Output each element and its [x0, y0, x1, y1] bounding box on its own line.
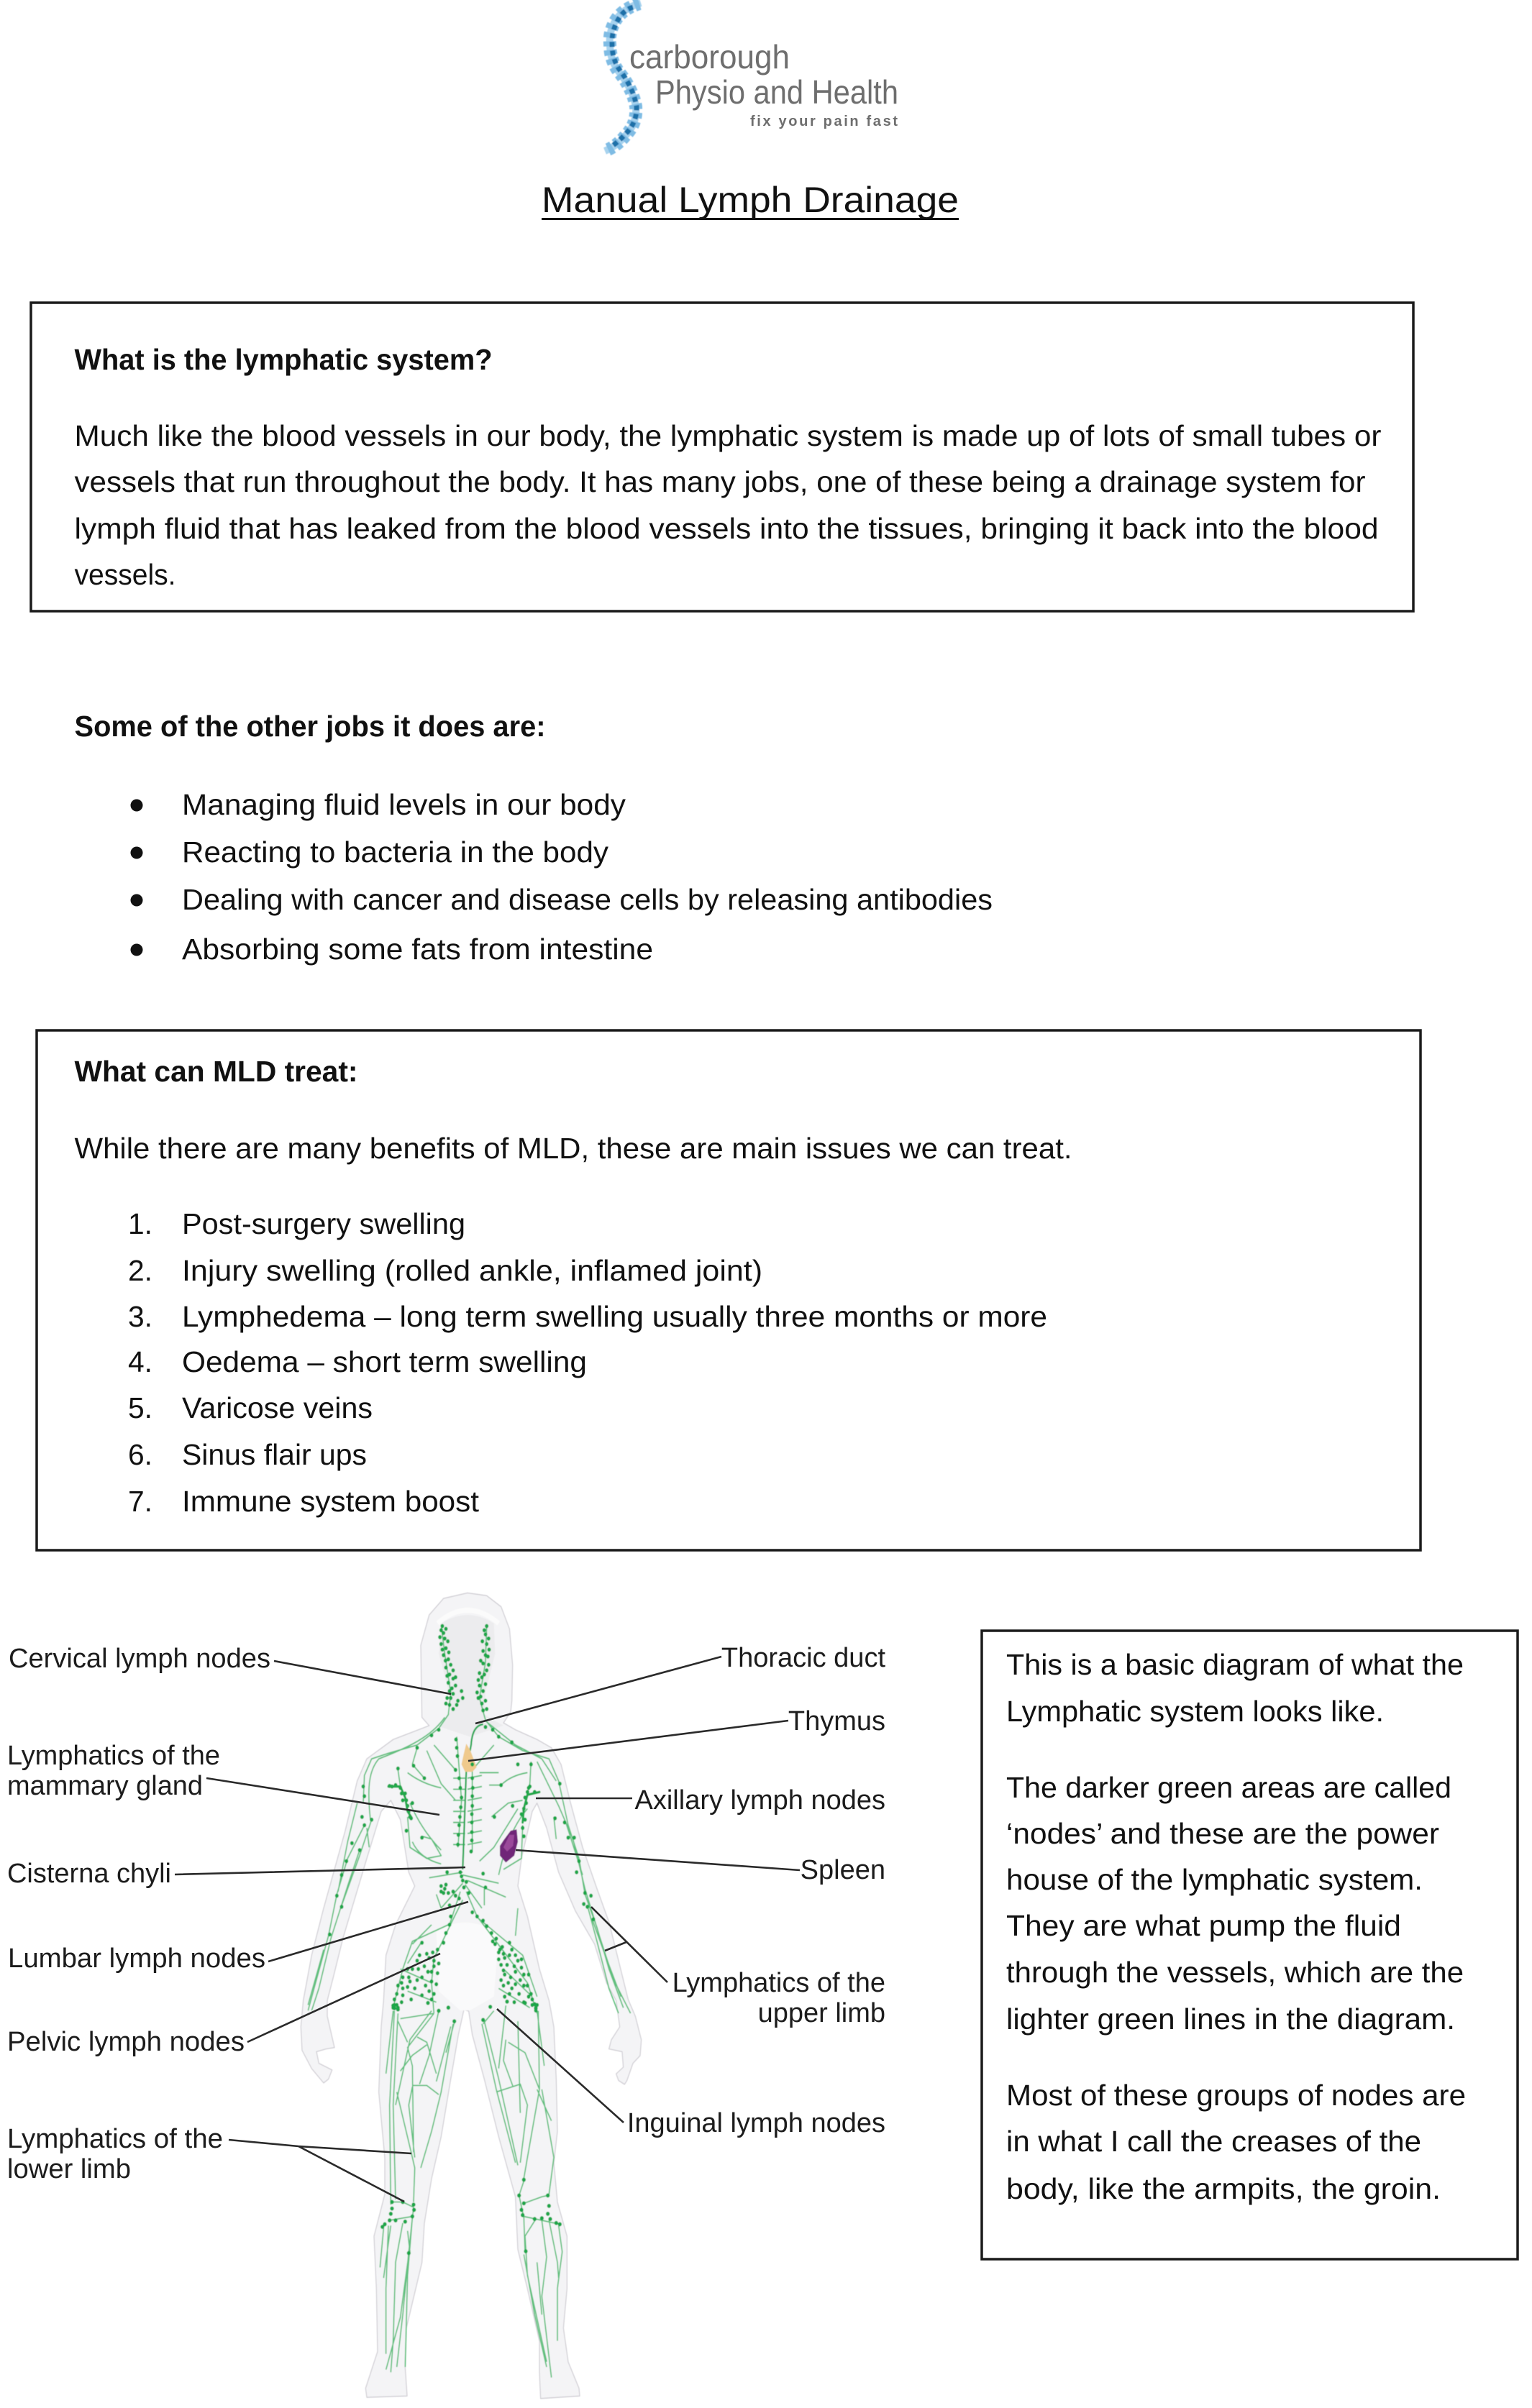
lymph nodes: upper body [329, 1626, 593, 2010]
label: lymphatics of the upper limb [672, 1968, 885, 2028]
bullet list: other jobs: Absorbing some fats from intestine [182, 933, 653, 966]
logo: Scarborough Physio and Health: Physio and Health [655, 73, 898, 111]
body outline [301, 1593, 642, 2399]
label: lymphatics of the mammary gland: mammary gland [7, 1771, 203, 1801]
label: lymphatics of the upper limb: Lymphatics of the [672, 1968, 885, 1998]
heading: what can MLD treat: What can MLD treat: [75, 1055, 358, 1088]
icon: spine forming letter S [605, 3, 641, 151]
text block: nodes explanation: ‘nodes’ and these are the power [1006, 1817, 1439, 1850]
numbered list: treatable issues: Lymphedema – long term swelling usually three months or more [182, 1300, 1047, 1333]
numbered list: treatable issues: 3. [128, 1300, 152, 1333]
numbered list: treatable issues: 7. [128, 1485, 152, 1518]
label: lymphatics of the lower limb [7, 2124, 223, 2184]
numbered list: treatable issues: Immune system boost [182, 1485, 480, 1518]
label: lymphatics of the mammary gland [7, 1741, 220, 1801]
bullet list: other jobs [131, 788, 993, 966]
title: Manual Lymph Drainage [542, 180, 959, 220]
text block: nodes explanation: through the vessels, which are the [1006, 1956, 1464, 1989]
numbered list: treatable issues: Oedema – short term swelling [182, 1345, 587, 1378]
text block: intro: This is a basic diagram of what the [1006, 1648, 1464, 1681]
label: lymphatics of the lower limb: Lymphatics of the [7, 2124, 223, 2154]
text block: lymphatic system description: vessels that run throughout the body. It has many jobs, one of these being a drainage system for [75, 465, 1365, 498]
text block: nodes explanation: The darker green areas are called [1006, 1771, 1451, 1804]
label: cervical lymph nodes: Cervical lymph nodes [9, 1644, 270, 1674]
text block: nodes explanation [1006, 1771, 1464, 2036]
thymus [462, 1744, 477, 1772]
label: lymphatics of the upper limb: upper limb [758, 1998, 885, 2028]
label: inguinal lymph nodes: Inguinal lymph nodes [627, 2108, 885, 2138]
panel: diagram explanation [982, 1631, 1518, 2259]
numbered list: treatable issues: Varicose veins [182, 1391, 373, 1424]
text block: lymphatic system description: Much like the blood vessels in our body, the lymphatic system is made up of lots of small tubes or [75, 419, 1381, 452]
label: lumbar lymph nodes: Lumbar lymph nodes [8, 1944, 265, 1974]
heading: other jobs: Some of the other jobs it does are: [75, 710, 545, 743]
label: thoracic duct: Thoracic duct [721, 1643, 885, 1673]
leader lines [175, 1657, 800, 2202]
label: lymphatics of the lower limb: lower limb [7, 2154, 131, 2184]
text block: lymphatic system description: vessels. [75, 558, 175, 591]
lymph vessels: legs [380, 2005, 562, 2378]
text block: intro: While there are many benefits of MLD, these are main issues we can treat. [75, 1132, 1072, 1165]
numbered list: treatable issues: Post-surgery swelling [182, 1207, 465, 1240]
lymph nodes: axilla clusters [388, 1787, 539, 1823]
text block: creases of the body [1006, 2079, 1466, 2205]
logo: Scarborough Physio and Health: fix your pain fast [750, 114, 898, 129]
bullet list: other jobs: Dealing with cancer and disease cells by releasing antibodies [182, 883, 993, 916]
numbered list: treatable issues: Sinus flair ups [182, 1438, 367, 1471]
label: thymus: Thymus [788, 1706, 885, 1736]
heading: what is the lymphatic system: What is the lymphatic system? [75, 343, 492, 376]
text block: intro: Lymphatic system looks like. [1006, 1695, 1384, 1728]
panel: what is the lymphatic system [31, 303, 1413, 611]
text block: nodes explanation: They are what pump the fluid [1006, 1909, 1401, 1942]
logo: Scarborough Physio and Health [605, 3, 898, 151]
text block: creases of the body: in what I call the creases of the [1006, 2125, 1421, 2158]
spleen [500, 1829, 518, 1862]
body silhouette with vessels, nodes, thymus and spleen [301, 1593, 642, 2399]
numbered list: treatable issues: 5. [128, 1391, 152, 1424]
label: spleen: Spleen [801, 1855, 885, 1885]
diagram: lymphatic system body [7, 1593, 885, 2399]
text block: nodes explanation: lighter green lines in the diagram. [1006, 2002, 1455, 2036]
text block: lymphatic system description [75, 419, 1381, 591]
bullet list: other jobs: Reacting to bacteria in the body [182, 836, 609, 869]
text block: lymphatic system description: lymph fluid that has leaked from the blood vessels into the tissues, bringing it back into the blood [75, 512, 1379, 545]
numbered list: treatable issues: 1. [128, 1207, 152, 1240]
text block: intro [1006, 1648, 1464, 1728]
thoracic duct [462, 1724, 483, 1869]
label: pelvic lymph nodes: Pelvic lymph nodes [7, 2027, 245, 2057]
label: cisterna chyli: Cisterna chyli [7, 1859, 171, 1889]
numbered list: treatable issues: 4. [128, 1345, 152, 1378]
numbered list: treatable issues: Injury swelling (rolled ankle, inflamed joint) [182, 1254, 762, 1287]
numbered list: treatable issues [128, 1207, 1047, 1518]
panel: what can MLD treat [37, 1030, 1421, 1550]
numbered list: treatable issues: 2. [128, 1254, 152, 1287]
logo wordmark: carborough [629, 38, 790, 75]
text block: creases of the body: Most of these groups of nodes are [1006, 2079, 1466, 2112]
lymph vessels: upper body [308, 1625, 631, 2013]
text block: nodes explanation: house of the lymphatic system. [1006, 1863, 1423, 1896]
lymph nodes: legs [383, 2002, 560, 2253]
label: lymphatics of the mammary gland: Lymphatics of the [7, 1741, 220, 1771]
text block: creases of the body: body, like the armpits, the groin. [1006, 2172, 1441, 2205]
numbered list: treatable issues: 6. [128, 1438, 152, 1471]
bullet list: other jobs: Managing fluid levels in our body [182, 788, 626, 821]
label: axillary lymph nodes: Axillary lymph nodes [635, 1785, 885, 1816]
